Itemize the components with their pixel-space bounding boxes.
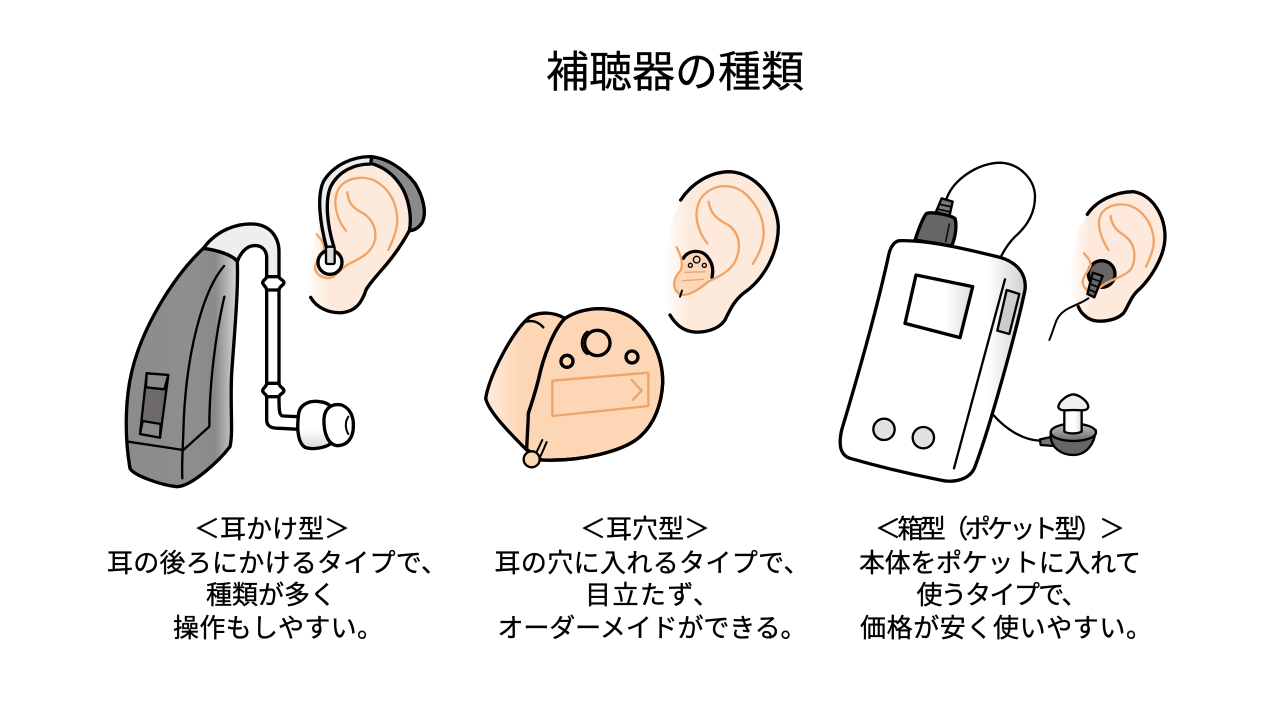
caption: in-the-ear type: ＜耳穴型＞ (580, 514, 710, 544)
caption: pocket type: ＜箱型（ポケット型）＞ (875, 514, 1125, 544)
illustration: in-the-ear hearing aid (486, 172, 778, 467)
caption: behind-the-ear type: 耳の後ろにかけるタイプで、 (107, 548, 447, 578)
caption: in-the-ear type: 目立たず、 (585, 580, 719, 610)
illustration: pocket hearing aid (840, 163, 1165, 481)
tube (263, 277, 298, 429)
large device (486, 309, 663, 467)
caption: pocket type (859, 514, 1152, 643)
ear with in-the-ear aid (663, 172, 778, 332)
caption: behind-the-ear type (107, 514, 447, 643)
caption: pocket type: 本体をポケットに入れて (859, 548, 1141, 578)
cable to ear (947, 163, 1035, 257)
device body (126, 248, 238, 487)
caption: behind-the-ear type: 操作もしやすい。 (173, 613, 383, 643)
caption: in-the-ear type: オーダーメイドができる。 (498, 613, 806, 643)
ear with earpiece (1049, 192, 1165, 340)
caption: in-the-ear type (494, 514, 810, 643)
device body (840, 241, 1025, 481)
ear hook (203, 224, 279, 277)
caption: behind-the-ear type: 種類が多く (206, 580, 336, 610)
ear with behind-the-ear aid (305, 157, 424, 313)
earpiece with cable (993, 394, 1096, 455)
illustration: behind-the-ear hearing aid (126, 157, 424, 487)
caption: in-the-ear type: 耳の穴に入れるタイプで、 (494, 548, 810, 578)
title: 補聴器の種類 (546, 49, 804, 97)
caption: pocket type: 使うタイプで、 (916, 580, 1088, 610)
ear tip (298, 401, 353, 449)
caption: behind-the-ear type: ＜耳かけ型＞ (194, 514, 350, 544)
plug (915, 198, 956, 246)
caption: pocket type: 価格が安く使いやすい。 (860, 613, 1152, 643)
